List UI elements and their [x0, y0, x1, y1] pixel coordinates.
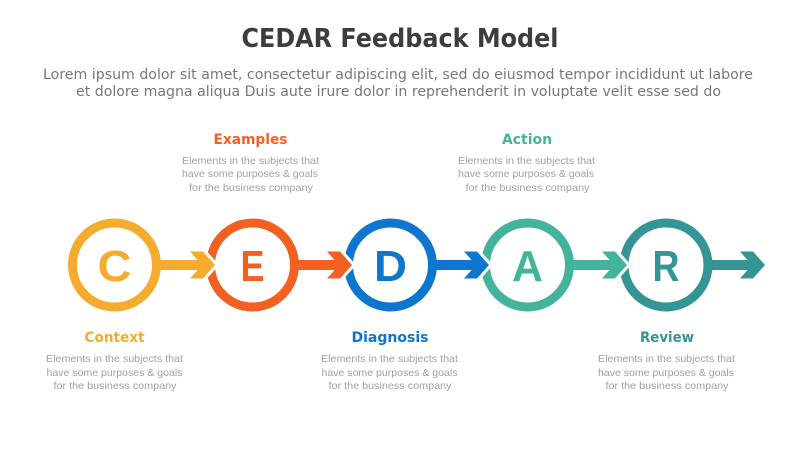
label: Review: [598, 330, 735, 392]
icon: C ring: [72, 223, 156, 307]
arrow: C to E: [160, 252, 215, 278]
description: Examples: have some purposes & goals: [182, 168, 318, 180]
heading: Diagnosis: Diagnosis: [352, 330, 428, 346]
heading: Action: Action: [502, 132, 552, 148]
heading: Context: Context: [84, 330, 145, 346]
intro text: et dolore magna aliqua Duis aute irure dolor in reprehenderit in voluptate velit esse sed do: [76, 84, 721, 100]
icon: R ring: [624, 223, 708, 307]
letter C: C: [98, 242, 132, 291]
description: Review: [598, 353, 735, 392]
description: Context: have some purposes & goals: [46, 367, 183, 379]
step: Context circle and arrow: [72, 223, 156, 307]
title: CEDAR Feedback Model: [242, 24, 558, 54]
intro text: Lorem ipsum dolor sit amet, consectetur adipiscing elit, sed do eiusmod tempor incididunt ut labore: [43, 67, 753, 83]
arrow: E to D: [297, 252, 352, 278]
description: Action: have some purposes & goals: [458, 168, 594, 180]
arrow: R outgoing: [710, 252, 765, 278]
description: Diagnosis: [321, 353, 458, 392]
description: Examples: for the business company: [189, 182, 314, 194]
step: Examples circle: [210, 223, 294, 307]
label: Examples: [182, 132, 319, 194]
letter A: A: [512, 242, 543, 291]
label: Context: [46, 330, 183, 392]
description: Review: for the business company: [606, 380, 729, 392]
description: Diagnosis: have some purposes & goals: [322, 367, 458, 379]
description: Examples: Elements in the subjects that: [182, 155, 319, 167]
description: Context: [46, 353, 183, 392]
icon: E ring: [210, 223, 294, 307]
description: Action: Elements in the subjects that: [458, 155, 595, 167]
label: Action: [458, 132, 595, 194]
description: Diagnosis: for the business company: [328, 380, 452, 392]
arrow: D to A: [435, 252, 489, 278]
description: Review: Elements in the subjects that: [598, 353, 735, 365]
label: Diagnosis: [321, 330, 458, 392]
step: Action circle: [486, 223, 570, 307]
letter R: R: [652, 242, 680, 291]
letter E: E: [240, 242, 264, 291]
arrow: A to R: [572, 252, 627, 278]
step: Review circle: [624, 223, 708, 307]
step: Diagnosis circle: [348, 223, 432, 307]
heading: Review: Review: [640, 330, 694, 346]
description: Context: Elements in the subjects that: [46, 353, 183, 365]
heading: Examples: Examples: [214, 132, 288, 148]
icon: D ring: [348, 223, 432, 307]
icon: A ring: [486, 223, 570, 307]
description: Diagnosis: Elements in the subjects that: [321, 353, 458, 365]
intro text: [43, 67, 753, 100]
description: Context: for the business company: [54, 380, 177, 392]
description: Review: have some purposes & goals: [598, 367, 734, 379]
description: Examples: [182, 155, 319, 194]
letter D: D: [374, 242, 407, 291]
description: Action: for the business company: [466, 182, 590, 194]
description: Action: [458, 155, 595, 194]
